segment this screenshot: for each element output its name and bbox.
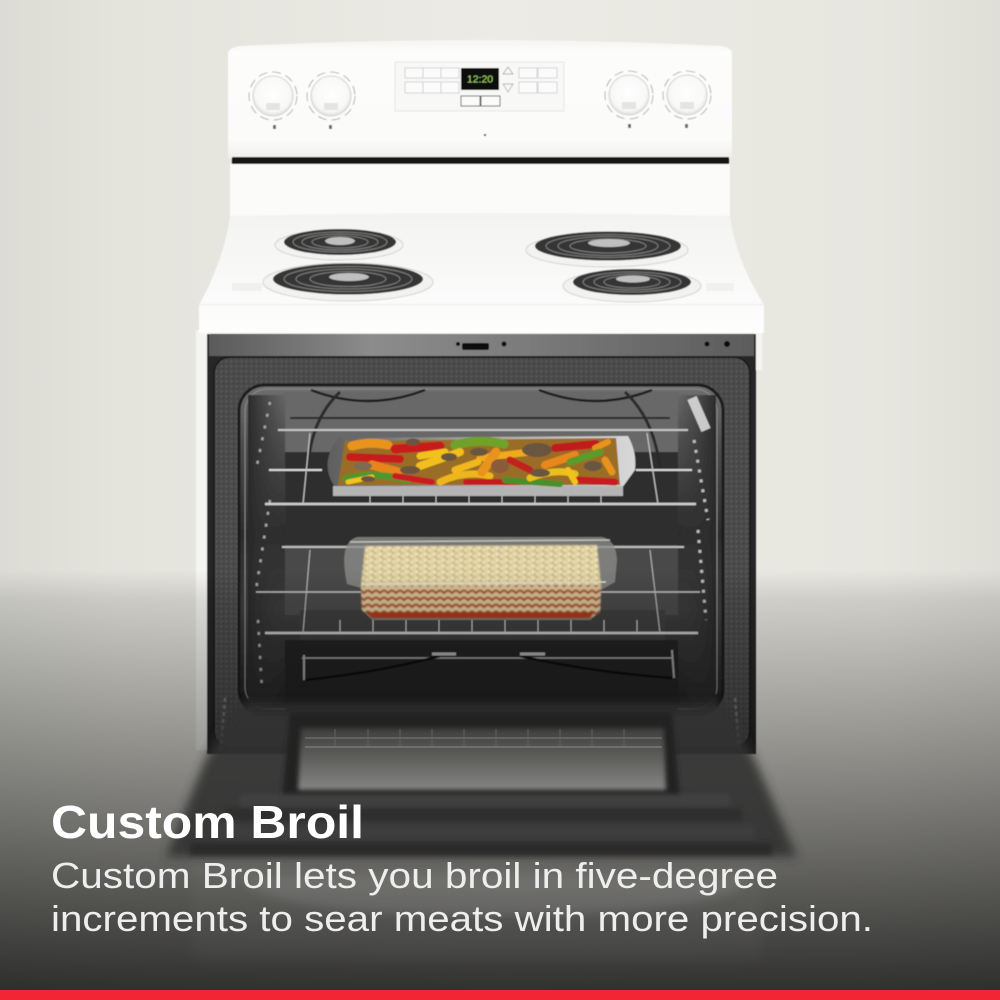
dark gradient overlay xyxy=(0,570,1000,990)
cooktop xyxy=(199,213,764,333)
description text xyxy=(51,855,873,939)
side rail left xyxy=(248,395,288,710)
door lower bands xyxy=(190,794,772,855)
door window xyxy=(298,728,666,790)
control panel xyxy=(228,40,732,158)
burner front left xyxy=(263,263,433,301)
burner front right xyxy=(563,269,701,302)
side rail right xyxy=(676,395,716,710)
clock display xyxy=(461,68,499,90)
latch and holes xyxy=(456,341,730,350)
open oven door xyxy=(166,704,797,960)
burner back right xyxy=(526,232,688,267)
oven white side walls xyxy=(196,330,762,750)
lower rack xyxy=(256,547,700,633)
backguard xyxy=(230,164,730,224)
oven cavity xyxy=(239,385,723,715)
knob left 2 xyxy=(307,72,355,120)
red footer bar xyxy=(0,990,1000,1000)
display cluster xyxy=(395,62,564,111)
clock display: 12:20 xyxy=(467,74,493,86)
broil element xyxy=(308,390,660,470)
heading: Custom Broil: Custom Broil xyxy=(51,796,364,848)
oven frame xyxy=(207,334,756,754)
door inner recess xyxy=(282,712,680,800)
vegetables xyxy=(346,441,615,484)
glass dish with lasagna xyxy=(344,537,617,620)
description text: Custom Broil lets you broil in five-degree xyxy=(51,855,778,896)
burner back left xyxy=(275,229,403,260)
description text: increments to sear meats with more precision. xyxy=(51,898,873,939)
bake element xyxy=(302,650,674,680)
upper rack xyxy=(265,430,696,504)
door panel xyxy=(166,704,797,857)
lower range base xyxy=(192,862,762,960)
range photo xyxy=(196,40,764,754)
dark slit xyxy=(232,157,729,164)
knob right 1 xyxy=(605,71,653,119)
door reflection xyxy=(240,875,750,915)
knob markings xyxy=(273,124,688,136)
knob left 1 xyxy=(249,72,297,120)
broil pan with vegetables xyxy=(328,436,635,496)
knob right 2 xyxy=(663,71,711,119)
door hinges xyxy=(221,698,739,748)
